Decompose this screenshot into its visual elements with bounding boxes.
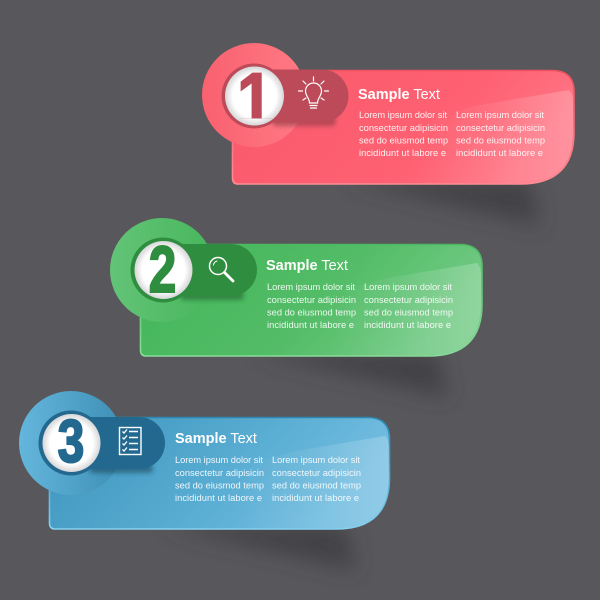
- card body: [232, 70, 574, 184]
- text column left: [175, 455, 264, 503]
- gloss highlight: [328, 263, 481, 355]
- text column left: incididunt ut labore e: [359, 148, 446, 158]
- number badge: [38, 408, 104, 476]
- text column right: Lorem ipsum dolor sit: [364, 282, 452, 292]
- card shadow: [161, 525, 356, 571]
- text column right: consectetur adipisicin: [456, 123, 545, 133]
- icon: magnifier: [210, 258, 233, 281]
- number badge: 3: [58, 408, 84, 475]
- pill: [162, 244, 257, 296]
- text column left: sed do eiusmod temp: [359, 136, 448, 146]
- pill shadow: [89, 464, 153, 473]
- number badge: 1: [237, 57, 273, 144]
- number badge: [130, 233, 196, 307]
- pill: [254, 70, 348, 122]
- heading: Sample Text: [358, 87, 440, 103]
- text column right: consectetur adipisicin: [364, 295, 453, 305]
- text column left: Lorem ipsum dolor sit: [359, 110, 447, 120]
- card shadow: [345, 180, 540, 226]
- heading: Sample Text: [266, 258, 348, 274]
- outer circle: [110, 218, 214, 322]
- panel: step 2 green: [110, 218, 482, 398]
- text column left: Lorem ipsum dolor sit: [175, 455, 263, 465]
- text column left: incididunt ut labore e: [267, 320, 354, 330]
- outer circle: [19, 391, 123, 495]
- text column right: Lorem ipsum dolor sit: [272, 455, 360, 465]
- text column right: incididunt ut labore e: [364, 320, 451, 330]
- text column right: sed do eiusmod temp: [456, 136, 545, 146]
- text column right: Lorem ipsum dolor sit: [456, 110, 544, 120]
- number badge: 2: [149, 233, 176, 307]
- text column right: sed do eiusmod temp: [364, 308, 453, 318]
- text column left: consectetur adipisicin: [175, 468, 264, 478]
- text column right: sed do eiusmod temp: [272, 480, 361, 490]
- panel: step 1 red: [202, 43, 574, 226]
- text column left: consectetur adipisicin: [267, 295, 356, 305]
- text column left: [359, 110, 448, 158]
- text column left: Lorem ipsum dolor sit: [267, 282, 355, 292]
- text column left: incididunt ut labore e: [175, 493, 262, 503]
- text column right: [272, 455, 361, 503]
- card body: [140, 244, 482, 356]
- text column right: [456, 110, 545, 158]
- gloss highlight: [236, 436, 389, 528]
- icon: light bulb: [298, 77, 328, 108]
- panel: step 3 blue: [19, 391, 390, 571]
- pill shadow: [180, 291, 244, 300]
- text column right: incididunt ut labore e: [272, 493, 359, 503]
- outer circle: [202, 43, 306, 147]
- number badge: [222, 64, 284, 128]
- pill: [71, 417, 165, 469]
- icon: checklist: [120, 428, 141, 454]
- text column left: [267, 282, 356, 330]
- pill shadow: [272, 117, 336, 126]
- heading: Sample Text: [175, 431, 257, 447]
- card body: [50, 418, 390, 529]
- gloss highlight: [420, 90, 573, 183]
- text column left: sed do eiusmod temp: [267, 308, 356, 318]
- text column right: consectetur adipisicin: [272, 468, 361, 478]
- text column right: incididunt ut labore e: [456, 148, 543, 158]
- text column left: sed do eiusmod temp: [175, 480, 264, 490]
- text column left: consectetur adipisicin: [359, 123, 448, 133]
- text column right: [364, 282, 453, 330]
- card shadow: [253, 352, 448, 398]
